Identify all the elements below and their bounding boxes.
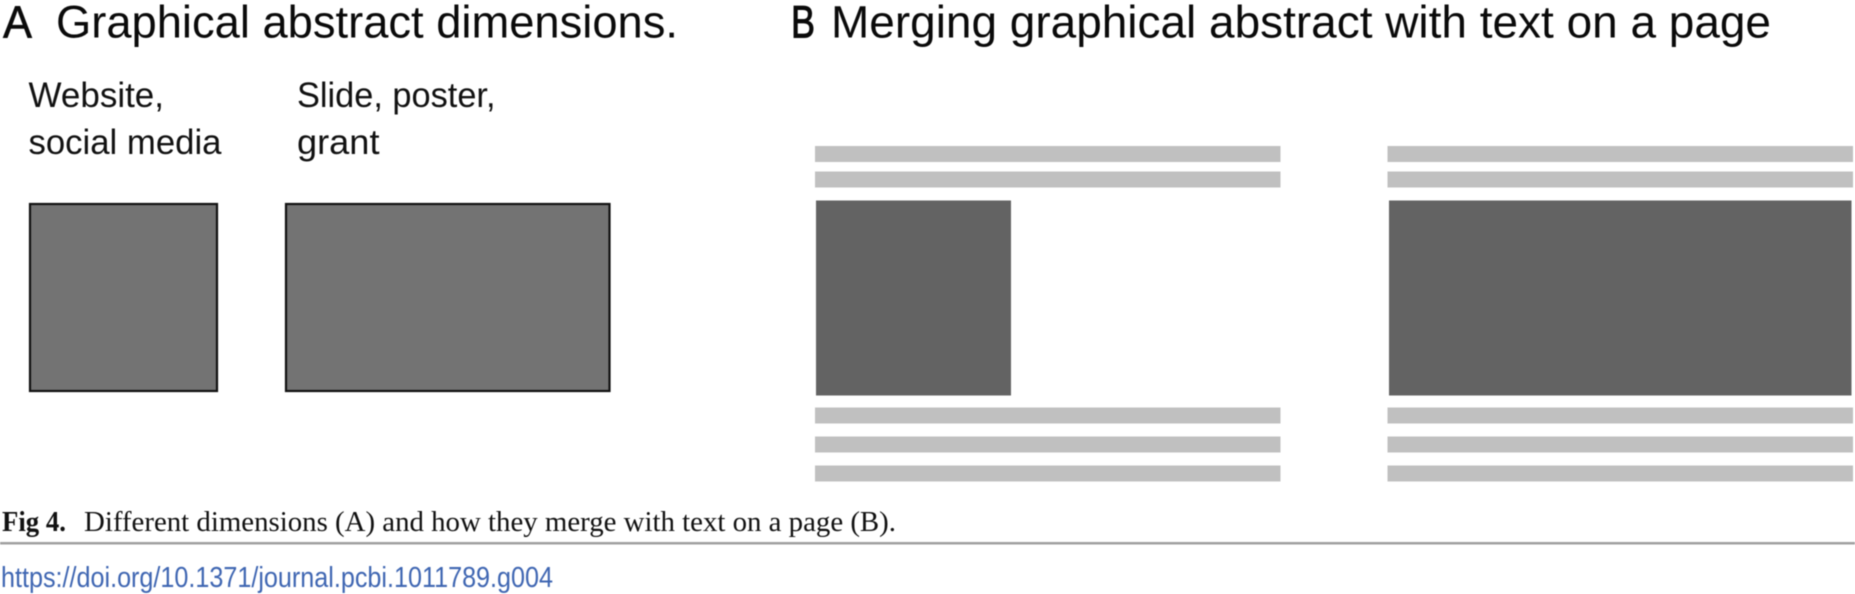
label: website, social media: social media xyxy=(28,123,222,162)
page layout: square abstract with text lines xyxy=(815,146,1280,482)
label: website, social media xyxy=(28,76,222,162)
figure caption: Fig 4. xyxy=(2,507,66,538)
wide graphical abstract placeholder xyxy=(286,204,610,391)
panel B: merging graphical abstract with text xyxy=(791,0,1853,482)
figure caption: Different dimensions (A) and how they merge with text on a page (B). xyxy=(84,507,896,538)
panel A: graphical abstract dimensions xyxy=(3,0,678,391)
page layout: wide abstract with text lines xyxy=(1388,146,1853,482)
square graphical abstract placeholder xyxy=(30,204,217,391)
DOI link text: https://doi.org/10.1371/journal.pcbi.1011789.g004 xyxy=(1,562,553,594)
label: slide, poster, grant xyxy=(297,76,496,162)
label: website, social media: Website, xyxy=(28,76,164,115)
label: slide, poster, grant: Slide, poster, xyxy=(297,76,496,115)
label: slide, poster, grant: grant xyxy=(297,123,380,162)
caption divider rule xyxy=(0,542,1855,544)
